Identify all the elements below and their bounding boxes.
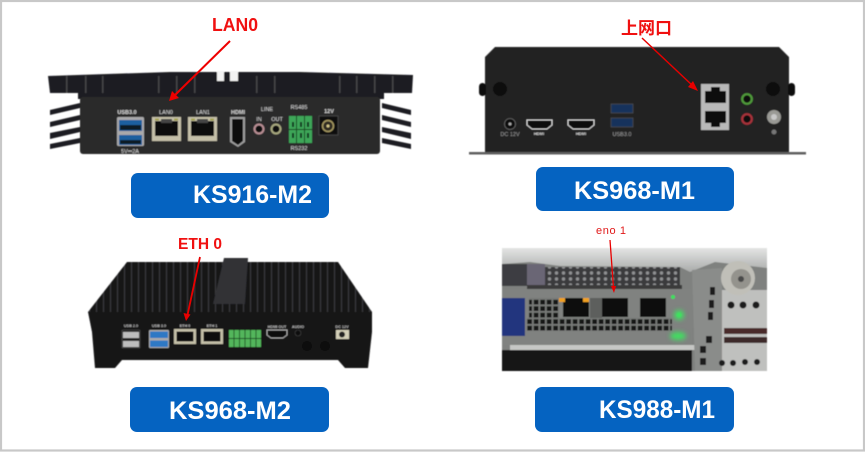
RJ45 centre xyxy=(602,298,628,317)
DC jack xyxy=(336,330,349,339)
ground screw xyxy=(767,110,781,134)
button: KS988-M1 xyxy=(535,387,734,432)
perforated grille xyxy=(545,267,680,285)
panel: KS968-M2 device xyxy=(88,258,372,368)
label: ETH 0: ETH 0 xyxy=(178,236,222,253)
LAN1 port xyxy=(188,117,217,141)
dark ledge xyxy=(527,285,682,289)
green terminal block xyxy=(229,330,261,347)
panel: KS968-M1 device xyxy=(469,47,806,154)
front panel xyxy=(88,312,372,368)
USB 3.0 ports xyxy=(149,330,169,348)
photo: KS988-M1 server xyxy=(502,248,767,371)
DC jack xyxy=(504,118,516,130)
port labels: ETH 0 xyxy=(180,324,190,328)
audio and knobs xyxy=(295,330,330,351)
port labels: USB 3.0 xyxy=(152,324,166,328)
USB stack xyxy=(117,117,144,146)
USB 2.0 ports xyxy=(122,330,140,348)
arrow: eno 1 xyxy=(610,240,616,293)
port labels: 12V xyxy=(324,109,334,115)
green glow xyxy=(670,295,686,340)
port labels: HDMI OUT xyxy=(268,325,287,329)
ETH 0 port xyxy=(174,329,196,344)
port labels: LAN1 xyxy=(196,110,210,116)
port labels: HDMI xyxy=(576,131,586,136)
power supply xyxy=(502,350,692,371)
port labels: HDMI xyxy=(231,110,245,116)
RJ45 left xyxy=(563,298,589,317)
port labels xyxy=(500,131,631,138)
button: KS968-M1: KS968-M1 xyxy=(574,177,695,205)
centre rail xyxy=(213,258,248,304)
port labels: DC 12V xyxy=(500,132,520,138)
label: 上网口: 上网口 xyxy=(621,19,672,38)
panel: KS916-M2 device xyxy=(48,71,413,155)
HDMI port xyxy=(230,117,245,147)
label: eno 1: eno 1 xyxy=(596,225,626,237)
button: KS916-M2: KS916-M2 xyxy=(193,181,312,209)
port labels: USB 2.0 xyxy=(124,324,138,328)
DC power jack xyxy=(319,116,338,135)
port labels: USB3.0 xyxy=(613,132,631,138)
USB ports xyxy=(611,104,633,127)
port labels: OUT xyxy=(271,117,283,123)
rack detail xyxy=(719,302,767,366)
purple bracket xyxy=(527,264,545,286)
mounting flange xyxy=(469,152,806,154)
port labels xyxy=(124,324,349,329)
button: KS968-M2: KS968-M2 xyxy=(169,397,291,425)
HDMI ports xyxy=(527,120,594,129)
button: KS968-M2 xyxy=(130,387,329,432)
lower rail xyxy=(510,345,700,350)
green terminal block xyxy=(289,116,312,143)
button: KS916-M2 xyxy=(131,173,329,218)
HDMI port xyxy=(267,330,287,338)
port labels: USB3.0 xyxy=(117,110,137,116)
heatsink top xyxy=(48,71,413,99)
arrow: ETH 0 xyxy=(184,257,200,321)
port labels: DC 12V xyxy=(335,325,349,329)
port labels: IN xyxy=(256,117,262,123)
port labels: RS485 xyxy=(291,105,307,111)
metal plate xyxy=(502,289,692,345)
arrow: 上网口 xyxy=(642,38,698,91)
port labels: AUDIO xyxy=(292,325,304,329)
side bracket xyxy=(692,268,722,371)
hole grid xyxy=(527,318,672,331)
dual LAN port xyxy=(701,84,729,130)
side fins xyxy=(50,103,411,149)
port labels: 5V⎓2A xyxy=(121,149,139,155)
port labels xyxy=(117,105,334,155)
port labels: ETH 1 xyxy=(207,324,217,328)
button: KS988-M1: KS988-M1 xyxy=(599,396,715,424)
left hole grid xyxy=(529,298,559,318)
RJ45 right xyxy=(640,298,666,317)
thumb screw xyxy=(721,261,755,295)
port labels: RS232 xyxy=(291,146,307,152)
antenna knobs xyxy=(479,82,795,96)
upper left shadow xyxy=(502,264,527,286)
ETH 1 port xyxy=(201,329,223,344)
port labels: LAN0 xyxy=(159,110,173,116)
bracket slots xyxy=(700,287,715,365)
button: KS968-M1 xyxy=(536,167,734,211)
audio jacks xyxy=(254,124,280,134)
mid hole columns xyxy=(590,298,602,318)
audio jacks xyxy=(742,94,752,124)
finned top xyxy=(88,262,372,312)
photo background xyxy=(502,248,767,371)
blue component xyxy=(502,298,525,336)
port labels: HDMI xyxy=(534,131,544,136)
amber LEDs xyxy=(559,298,589,302)
label: LAN0: LAN0 xyxy=(212,15,258,35)
arrow: LAN0 xyxy=(169,41,230,101)
LAN0 port xyxy=(152,117,181,141)
plastic wrap xyxy=(502,248,767,272)
port labels: LINE xyxy=(261,107,273,113)
rack strips xyxy=(722,290,767,371)
front panel xyxy=(80,97,380,154)
chassis xyxy=(485,47,789,153)
